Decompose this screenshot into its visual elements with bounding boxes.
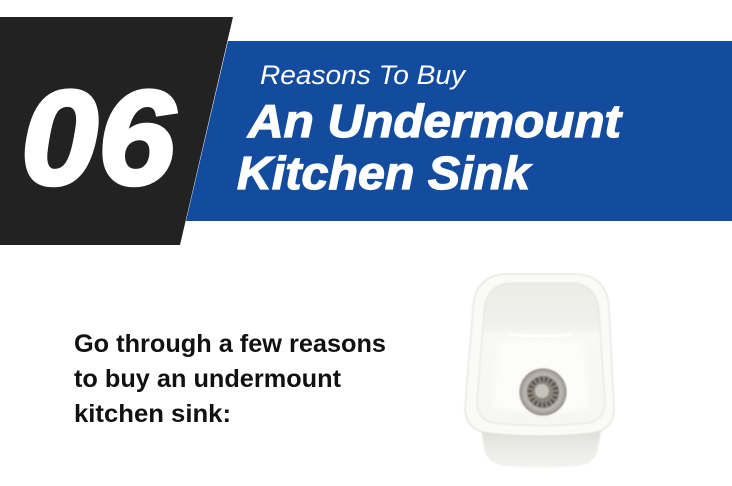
sink rim (465, 274, 614, 436)
sink basin (477, 283, 605, 426)
heading: reasons to buy: Reasons To Buy (260, 60, 467, 90)
sink outer body (480, 420, 603, 468)
drain (520, 368, 566, 416)
heading: an undermount kitchen sink: An Undermount (247, 95, 623, 147)
header block: black number panel (0, 17, 233, 245)
intro text: kitchen sink: (74, 400, 231, 428)
sink basin floor highlight (492, 340, 590, 413)
intro text: Go through a few reasons (74, 330, 386, 358)
sink image (465, 274, 614, 468)
intro text: to buy an undermount (74, 365, 342, 393)
sink basin back-wall highlight (510, 334, 574, 336)
header banner: blue band (186, 41, 732, 221)
number 06: 06 (21, 64, 177, 213)
heading: an undermount kitchen sink (237, 95, 623, 199)
intro text (74, 330, 386, 428)
heading: an undermount kitchen sink: Kitchen Sink (237, 147, 533, 199)
